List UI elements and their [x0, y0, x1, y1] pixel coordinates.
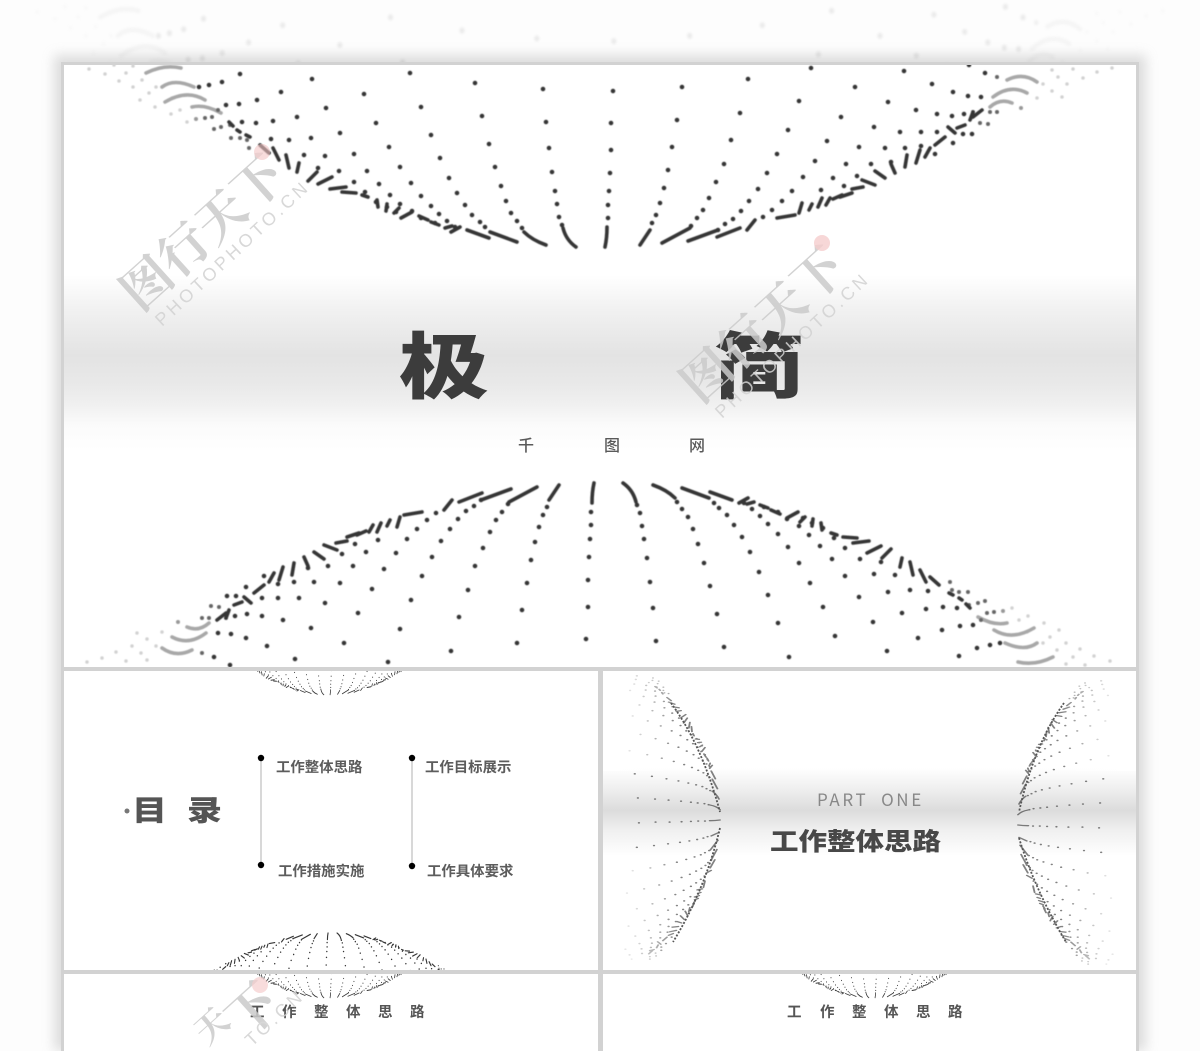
section title: 工作整体思路 [770, 828, 942, 855]
contents column one [258, 755, 365, 880]
contents heading [124, 794, 222, 827]
grey light band [603, 768, 1136, 856]
contents column two [409, 755, 514, 880]
dotted sphere: top [89, 65, 1112, 247]
slide heading: 路 [948, 1004, 963, 1021]
mini sphere [257, 974, 402, 998]
sphere: left side [624, 675, 721, 960]
slide heading: 作 [820, 1004, 835, 1021]
slide heading: 作 [282, 1004, 297, 1021]
subtitle [518, 437, 705, 455]
title right character: 简 [714, 328, 804, 408]
watermark three: TO.CN [241, 985, 308, 1050]
contents heading: 目 [132, 794, 167, 827]
slide heading: 体 [346, 1004, 361, 1021]
contents column two: 工作目标展示 [425, 759, 511, 776]
panel: main cover slide [62, 64, 1138, 668]
watermark one: PHOTOPHOTO.CN [151, 176, 314, 330]
slide heading: 整 [852, 1004, 867, 1021]
contents heading: 录 [187, 794, 222, 827]
panel: bottom right slide [601, 973, 1139, 1051]
ghost sphere behind the slide [37, 7, 1163, 247]
sphere: right side [1017, 680, 1114, 965]
slide heading: 工 [250, 1005, 264, 1021]
dotted sphere: bottom [87, 483, 1110, 665]
contents column one: 工作整体思路 [276, 759, 363, 776]
watermark three [181, 964, 308, 1051]
watermark two: PHOTOPHOTO.CN [711, 268, 874, 422]
slide heading [250, 1004, 425, 1021]
watermark three: 下 [208, 964, 294, 1051]
watermark two: 图行天下 [662, 228, 859, 416]
slide heading: 工 [787, 1005, 802, 1021]
mini sphere: bottom [214, 932, 445, 970]
contents column one: 工作措施实施 [278, 862, 365, 880]
slide heading: 体 [884, 1004, 899, 1021]
title left character: 极 [399, 328, 489, 408]
subtitle: 千 [518, 437, 534, 455]
slide heading: 思 [378, 1004, 393, 1021]
subtitle: 网 [689, 438, 705, 455]
panel: part one slide [602, 670, 1138, 972]
mini sphere [802, 974, 946, 998]
panel: contents slide [61, 670, 600, 971]
subtitle: 图 [604, 438, 620, 455]
panel: bottom left slide [61, 973, 600, 1051]
mini sphere: top [257, 671, 402, 696]
part label: PART ONE [817, 786, 924, 811]
watermark one: 图行天下 [102, 136, 299, 324]
contents column two: 工作具体要求 [427, 862, 514, 880]
slide heading: 路 [410, 1004, 425, 1021]
grey light band [64, 275, 1136, 450]
slide heading [787, 1004, 963, 1021]
slide heading: 整 [314, 1004, 329, 1021]
slide heading: 思 [916, 1004, 931, 1021]
